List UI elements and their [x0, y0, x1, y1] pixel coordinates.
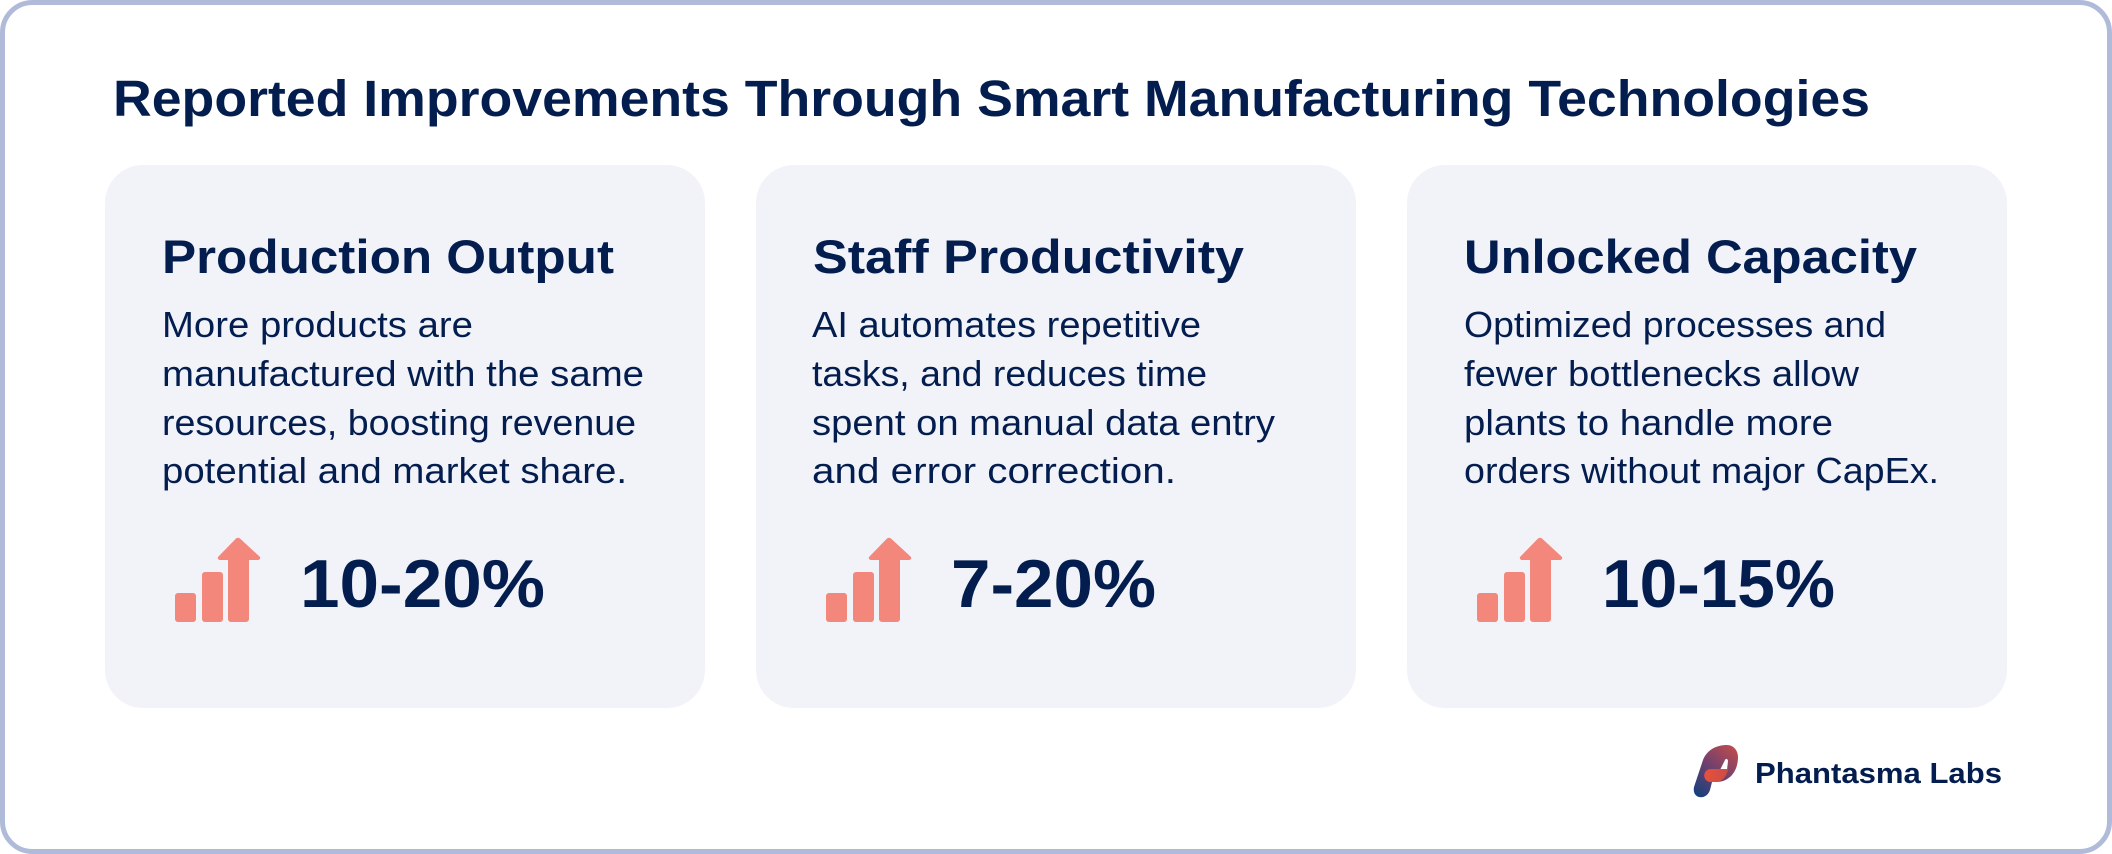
stat: 7-20%: 7-20%: [951, 546, 1156, 622]
icon: rising bars with arrow: [175, 538, 260, 622]
panel: production output: [105, 165, 705, 708]
stat: 10-20%: 10-20%: [300, 546, 545, 622]
text block: staff productivity description: and error correction.: [812, 450, 1176, 491]
text block: unlocked capacity description: fewer bottlenecks allow: [1464, 353, 1860, 394]
text block: production output description: More products are: [162, 304, 473, 345]
text block: production output description: resources, boosting revenue: [162, 402, 636, 443]
text block: production output description: potential and market share.: [162, 450, 627, 491]
panel: staff productivity: [756, 165, 1356, 708]
icon: rising bars with arrow: [826, 538, 911, 622]
heading: production output: Production Output: [162, 230, 614, 283]
text block: production output description: [162, 304, 644, 491]
text block: staff productivity description: spent on manual data entry: [812, 402, 1275, 443]
icon: rising bars with arrow: [1477, 538, 1562, 622]
text block: production output description: manufactured with the same: [162, 353, 644, 394]
title: Reported Improvements Through Smart Manufacturing Technologies: [113, 70, 1870, 127]
text block: unlocked capacity description: Optimized processes and: [1464, 304, 1886, 345]
text block: unlocked capacity description: orders without major CapEx.: [1464, 450, 1939, 491]
text block: staff productivity description: [812, 304, 1275, 491]
stat: 10-15%: 10-15%: [1602, 546, 1835, 622]
text block: staff productivity description: tasks, and reduces time: [812, 353, 1207, 394]
icon: logo mark: [1694, 745, 1738, 797]
panel: unlocked capacity: [1407, 165, 2007, 708]
logo: Phantasma Labs: [1694, 745, 2002, 797]
text block: unlocked capacity description: [1464, 304, 1939, 491]
heading: unlocked capacity: Unlocked Capacity: [1464, 230, 1917, 283]
brand name: Phantasma Labs: [1755, 758, 2002, 790]
heading: staff productivity: Staff Productivity: [813, 230, 1244, 283]
text block: unlocked capacity description: plants to handle more: [1464, 402, 1833, 443]
text block: staff productivity description: AI automates repetitive: [812, 304, 1201, 345]
